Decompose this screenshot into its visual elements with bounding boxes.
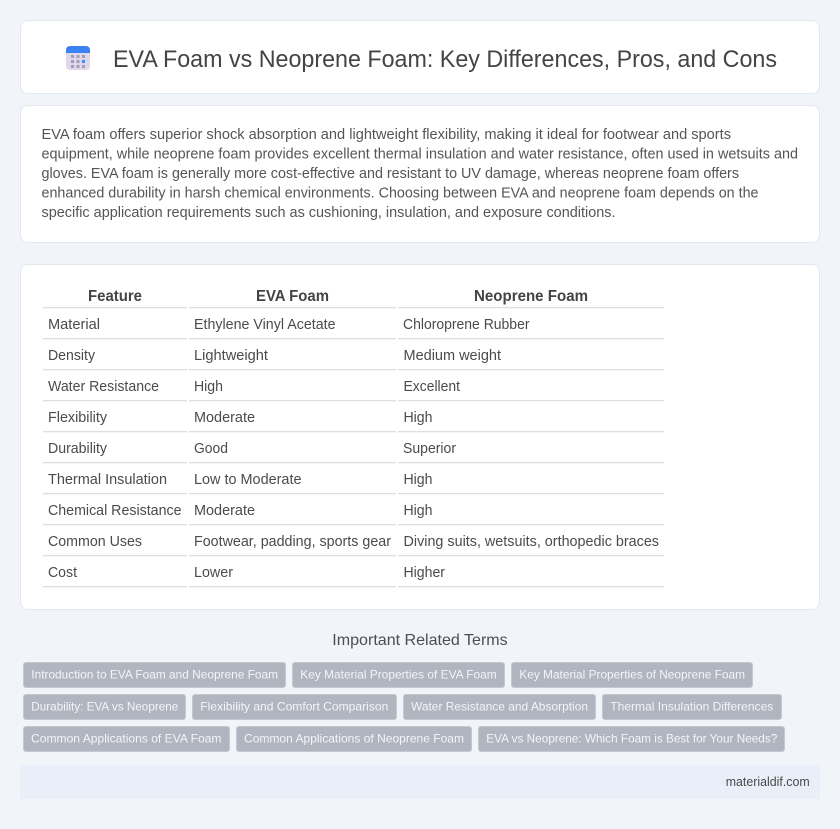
table row: durability (43, 441, 664, 463)
tag: water resistance (404, 694, 596, 720)
table header row: Neoprene Foam (474, 288, 588, 305)
tag: durability: Durability: EVA vs Neoprene (31, 700, 179, 714)
table row: common uses: Common Uses (48, 534, 142, 550)
table row: density: Lightweight (194, 348, 268, 364)
table row: flexibility (43, 410, 664, 432)
table row: material: Ethylene Vinyl Acetate (194, 317, 336, 333)
table row: water resistance: Excellent (404, 379, 460, 395)
table row: durability: Superior (403, 441, 456, 457)
table row: water resistance: High (194, 379, 223, 395)
table row: common uses: Diving suits, wetsuits, orthopedic braces (404, 534, 659, 550)
tag: which foam is best: EVA vs Neoprene: Which Foam is Best for Your Needs? (486, 732, 778, 746)
table header row: EVA Foam (256, 288, 329, 305)
footer (20, 765, 820, 799)
tag: neoprene applications (236, 726, 472, 752)
table row: material: Material (48, 317, 100, 333)
text block: introduction paragraph: EVA foam offers superior shock absorption and lightweight flexibility, making it ideal for footwear and sports (42, 127, 731, 143)
table row: density: Medium weight (404, 348, 501, 364)
table row: chemical resistance: High (404, 503, 432, 519)
table row: durability: Good (194, 441, 228, 457)
tag: durability (24, 694, 186, 720)
footer source text: materialdif.com (726, 774, 810, 789)
table row: thermal insulation: Thermal Insulation (48, 472, 167, 488)
table row: chemical resistance (43, 503, 664, 525)
table row: density: Density (48, 348, 96, 364)
table header row (43, 288, 664, 308)
panel: related term tags (24, 662, 784, 752)
tag: neoprene applications: Common Applications of Neoprene Foam (244, 732, 464, 746)
tag: which foam is best (478, 726, 784, 752)
text block: introduction paragraph: gloves. EVA foam is generally more cost-effective and resistant to UV damage, whereas neoprene foam offers (42, 166, 739, 182)
table row: flexibility: Flexibility (48, 410, 108, 426)
table row: water resistance: Water Resistance (48, 379, 159, 395)
panel: introduction (20, 106, 820, 242)
table row: water resistance (43, 379, 664, 401)
table row: material (43, 317, 664, 339)
tag: thermal insulation (602, 694, 782, 720)
table row: cost: Cost (48, 565, 77, 581)
table header row: Feature (88, 288, 142, 305)
text block: introduction paragraph (42, 127, 798, 221)
title: EVA Foam vs Neoprene Foam: Key Differences, Pros, and Cons (113, 46, 777, 73)
tag: introduction: Introduction to EVA Foam and Neoprene Foam (31, 668, 278, 682)
tag: EVA applications: Common Applications of EVA Foam (31, 732, 222, 746)
tag: flexibility (192, 694, 396, 720)
text block: introduction paragraph: specific application requirements such as cushioning, insulation, and exposure conditions. (42, 205, 616, 221)
table row: material: Chloroprene Rubber (403, 317, 530, 333)
table row: chemical resistance: Moderate (194, 503, 255, 519)
table row: durability: Durability (48, 441, 108, 457)
table row: common uses: Footwear, padding, sports gear (194, 534, 391, 550)
tag: thermal insulation: Thermal Insulation Differences (610, 700, 773, 714)
panel: comparison table (20, 264, 820, 610)
table row: flexibility: Moderate (194, 410, 255, 426)
table row: common uses (43, 534, 664, 556)
table row: thermal insulation: High (404, 472, 432, 488)
table row: thermal insulation (43, 472, 664, 494)
table row: cost: Higher (404, 565, 445, 581)
table row: cost (43, 565, 664, 587)
tag: flexibility: Flexibility and Comfort Comparison (200, 700, 388, 714)
tag: neoprene properties: Key Material Properties of Neoprene Foam (519, 668, 745, 682)
panel: title header (20, 20, 820, 94)
tag: water resistance: Water Resistance and Absorption (411, 700, 588, 714)
table row: cost: Lower (194, 565, 233, 581)
icon: calendar (66, 46, 90, 70)
table row: thermal insulation: Low to Moderate (194, 472, 302, 488)
tag: EVA properties (292, 662, 504, 688)
text block: introduction paragraph: equipment, while neoprene foam provides excellent thermal insulation and water resistance, often used in wetsuits and (42, 146, 798, 162)
table row: density (43, 348, 664, 370)
tag: EVA applications (24, 726, 230, 752)
tag: neoprene properties (512, 662, 752, 688)
text block: introduction paragraph: enhanced durability in harsh chemical environments. Choosing between EVA and neoprene foam depends on the (42, 186, 758, 202)
tag: introduction (24, 662, 286, 688)
table row: chemical resistance: Chemical Resistance (48, 503, 182, 519)
table row: flexibility: High (404, 410, 432, 426)
heading: important related terms: Important Related Terms (332, 632, 508, 649)
tag: EVA properties: Key Material Properties of EVA Foam (300, 668, 497, 682)
